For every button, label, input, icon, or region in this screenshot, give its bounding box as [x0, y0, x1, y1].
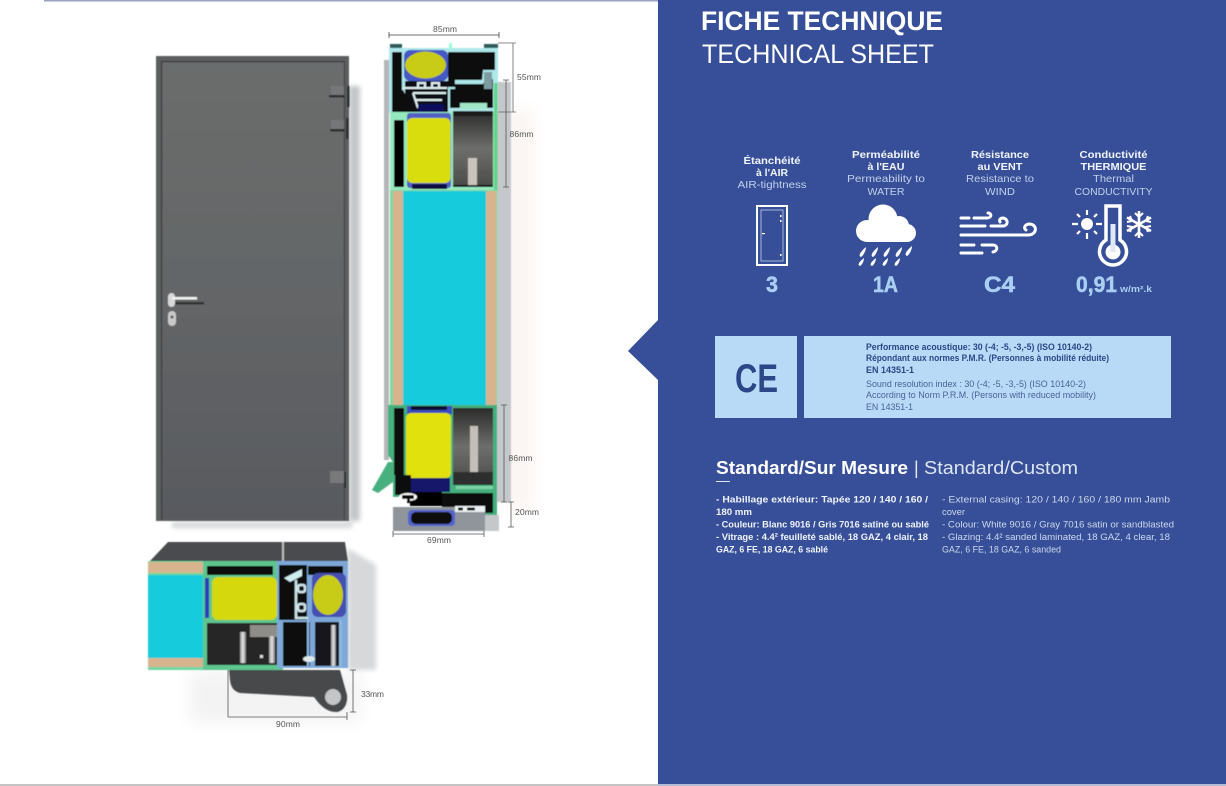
text block: french specifications: - Habillage extérieur: Tapée 120 / 140 / 160 /	[716, 494, 928, 506]
door handle	[168, 293, 204, 326]
dimension: 86mm lower	[501, 405, 532, 502]
top face	[150, 542, 348, 562]
heading: standard / custom	[716, 458, 1078, 482]
icon: CE: CE	[735, 357, 778, 401]
soft shadow of vertical section	[504, 110, 534, 510]
spec: thermal conductivity	[1072, 149, 1153, 297]
thermal conductivity label: THERMIQUE	[1080, 161, 1146, 173]
thermal conductivity label: Conductivité	[1080, 149, 1148, 161]
top rule	[44, 0, 1170, 2]
value: 0,91 w/m².k	[1076, 272, 1153, 297]
english text: Sound resolution index : 30 (-4; -5, -3,-5) (ISO 10140-2)	[866, 379, 1086, 389]
heading: standard / custom: |	[914, 458, 919, 478]
value: 3: 3	[766, 272, 778, 297]
spec: water permeability	[847, 149, 925, 297]
text block: english specifications: - Colour: White 9016 / Gray 7016 satin or sandblasted	[942, 520, 1174, 530]
dimension: 69mm: 69mm	[427, 535, 451, 545]
value: 0,91 w/m².k: 0,91	[1076, 272, 1117, 297]
french text: Répondant aux normes P.M.R. (Personnes à mobilité réduite)	[866, 353, 1109, 363]
dimension: 69mm	[393, 531, 484, 545]
value: 1A: 1A	[873, 272, 898, 297]
green frame	[203, 561, 283, 670]
door cast shadow	[172, 86, 360, 528]
air-tightness label: Étanchéité	[744, 154, 801, 167]
dimension: 55mm: 55mm	[517, 72, 541, 82]
french text	[866, 342, 1109, 375]
thermal conductivity label	[1074, 149, 1152, 198]
heading: technical sheet: TECHNICAL SHEET	[702, 39, 934, 69]
wind resistance label: Resistance to	[966, 173, 1034, 185]
dimension: 85mm	[389, 24, 499, 38]
dimension: 33mm	[350, 670, 384, 712]
wind resistance label: WIND	[985, 186, 1015, 198]
technical drawing: vertical section	[372, 43, 511, 531]
text block: french specifications: - Couleur: Blanc 9016 / Gris 7016 satiné ou sablé	[716, 520, 929, 530]
hinges	[329, 86, 350, 488]
water permeability label: WATER	[868, 186, 905, 198]
shadow strips	[384, 60, 511, 531]
insulation panel	[148, 561, 204, 670]
icon: snowflake	[1127, 211, 1151, 238]
value: C4: C4	[984, 272, 1016, 297]
text block: english specifications: - Glazing: 4.4² sanded laminated, 18 GAZ, 4 clear, 18	[942, 532, 1170, 543]
text block: english specifications: cover	[942, 507, 965, 518]
spec: air-tightness	[738, 154, 806, 297]
air-tightness label: à l'AIR	[756, 167, 788, 179]
thermal conductivity label: Thermal	[1093, 173, 1134, 185]
bottom sill profile	[393, 493, 485, 531]
upper fixed frame	[390, 83, 498, 191]
water permeability label	[847, 149, 925, 198]
text block: english specifications: - External casing: 120 / 140 / 160 / 180 mm Jamb	[942, 494, 1170, 506]
icon: sun	[1072, 210, 1102, 239]
blue frame	[277, 561, 348, 668]
icon: rain cloud	[856, 204, 916, 266]
dimension: 55mm	[498, 43, 541, 112]
top profile	[389, 43, 498, 114]
panel: CE mark	[715, 336, 797, 418]
heading: standard / custom: Standard/Sur Mesure	[716, 458, 908, 478]
french text: Performance acoustique: 30 (-4; -5, -3,-5) (ISO 10140-2)	[866, 342, 1092, 352]
product photo: door	[156, 56, 350, 521]
icon: thermometer	[1100, 206, 1126, 265]
text block: english specifications: GAZ, 6 FE, 18 GAZ, 6 sanded	[942, 544, 1061, 556]
text block: french specifications	[716, 494, 929, 556]
dimension: 90mm	[228, 670, 347, 729]
dimension: 86mm lower: 86mm	[508, 453, 532, 463]
door leaf	[162, 62, 344, 519]
text block: french specifications: GAZ, 6 FE, 18 GAZ, 6 sablé	[716, 544, 828, 556]
english text: EN 14351-1	[866, 402, 913, 412]
french text: EN 14351-1	[866, 365, 914, 375]
dimension: 90mm: 90mm	[276, 719, 300, 729]
insulation panel	[390, 190, 497, 406]
cast shadow of horizontal section	[347, 548, 376, 670]
heading: standard / custom: Standard/Custom	[924, 458, 1078, 478]
technical drawing: horizontal section	[148, 542, 348, 712]
value: 0,91 w/m².k: w/m².k	[1119, 284, 1153, 294]
dimension: 33mm: 33mm	[361, 689, 384, 699]
english text: According to Norm P.R.M. (Persons with reduced mobility)	[866, 390, 1096, 400]
lower fixed frame	[372, 405, 497, 515]
icon: wind	[961, 213, 1035, 253]
heading: fiche technique: FICHE TECHNIQUE	[701, 6, 943, 36]
dimension: 20mm: 20mm	[515, 507, 539, 517]
text block: french specifications: 180 mm	[716, 507, 752, 518]
dimension: 20mm	[508, 502, 539, 527]
water permeability label: à l'EAU	[868, 161, 904, 173]
dimension: 85mm: 85mm	[433, 24, 457, 34]
text block: french specifications: - Vitrage : 4.4² feuilleté sablé, 18 GAZ, 4 clair, 18	[716, 532, 928, 543]
dimension: 86mm upper: 86mm	[510, 129, 534, 139]
wind resistance label: Résistance	[971, 149, 1029, 161]
english text	[866, 379, 1096, 412]
air-tightness label: AIR-tightness	[738, 179, 806, 191]
icon: door	[757, 206, 787, 265]
air-tightness label	[738, 154, 806, 191]
soft shadow of horizontal section	[190, 672, 360, 722]
panel: acoustic performance	[804, 336, 1171, 418]
spec: wind resistance	[961, 149, 1035, 297]
text block: english specifications	[942, 494, 1174, 556]
dimension: 86mm upper	[503, 80, 534, 187]
wind resistance label: au VENT	[978, 161, 1023, 173]
wind resistance label	[966, 149, 1034, 198]
water permeability label: Perméabilité	[852, 149, 920, 161]
thermal conductivity label: CONDUCTIVITY	[1074, 186, 1152, 198]
hinge body	[229, 670, 347, 712]
panel: technical sheet background	[628, 0, 1226, 784]
bottom edge strip	[0, 784, 1226, 786]
water permeability label: Permeability to	[847, 173, 925, 185]
door frame	[156, 56, 349, 521]
